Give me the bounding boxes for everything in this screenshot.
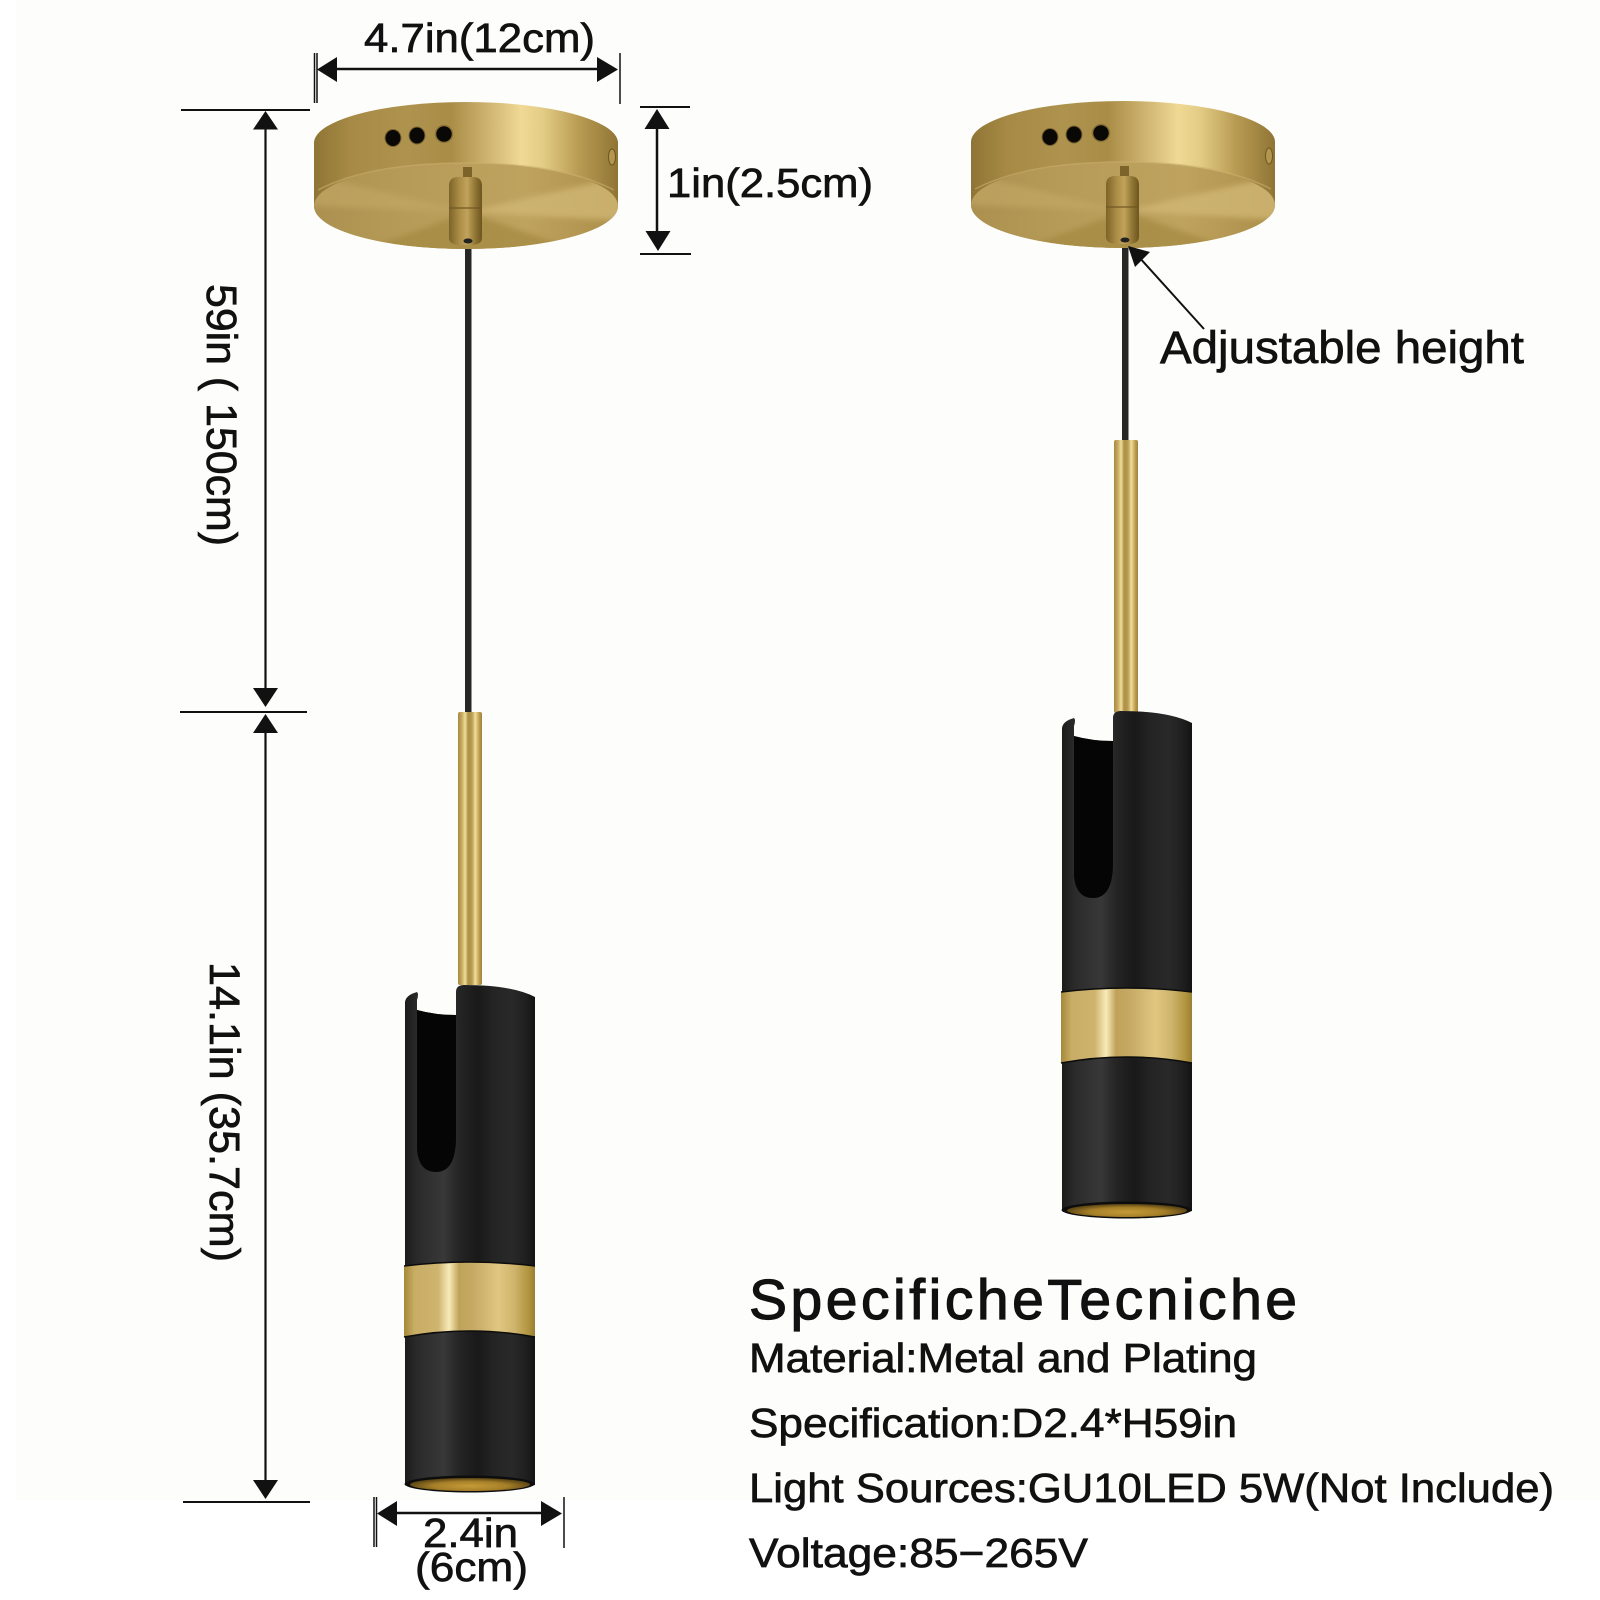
material: Material:Metal and Plating [749, 1335, 1257, 1381]
cord, right lamp [1122, 243, 1128, 440]
dimension: canopy height [640, 107, 873, 254]
dimension: lamp length 14.1in [183, 714, 310, 1502]
brass rod, right lamp [1114, 440, 1138, 713]
right pendant lamp [947, 101, 1297, 1218]
left pendant lamp [290, 102, 640, 1492]
heading: SpecificheTecniche [749, 1268, 1297, 1332]
callout: adjustable height [1128, 246, 1525, 373]
label: 14.1in (35.7cm): 14.1in (35.7cm) [200, 962, 248, 1262]
ceiling canopy [290, 102, 640, 262]
label: (6cm): (6cm) [415, 1544, 528, 1590]
light sources: Light Sources:GU10LED 5W(Not Include) [749, 1465, 1554, 1511]
dimension: cord length 59in [180, 110, 310, 712]
label: 4.7in(12cm): 4.7in(12cm) [364, 15, 595, 61]
cord [465, 243, 472, 712]
specifications text block [749, 1268, 1554, 1576]
dimension: shade diameter [374, 1497, 564, 1590]
ceiling canopy, right lamp [947, 101, 1297, 261]
label: 59in (150cm): 59in ( 150cm) [197, 284, 245, 546]
voltage: Voltage:85−265V [749, 1530, 1089, 1576]
black shade with brass band [404, 985, 535, 1492]
brass rod [458, 712, 482, 985]
callout label: Adjustable height [1160, 322, 1525, 373]
arrow to cord [1128, 246, 1204, 329]
black shade, right lamp [1061, 711, 1192, 1218]
label: 2.4in: 2.4in [423, 1510, 518, 1556]
specification: Specification:D2.4*H59in [749, 1400, 1237, 1446]
dimension: canopy width [314, 15, 620, 104]
label: 1in(2.5cm): 1in(2.5cm) [667, 160, 873, 206]
